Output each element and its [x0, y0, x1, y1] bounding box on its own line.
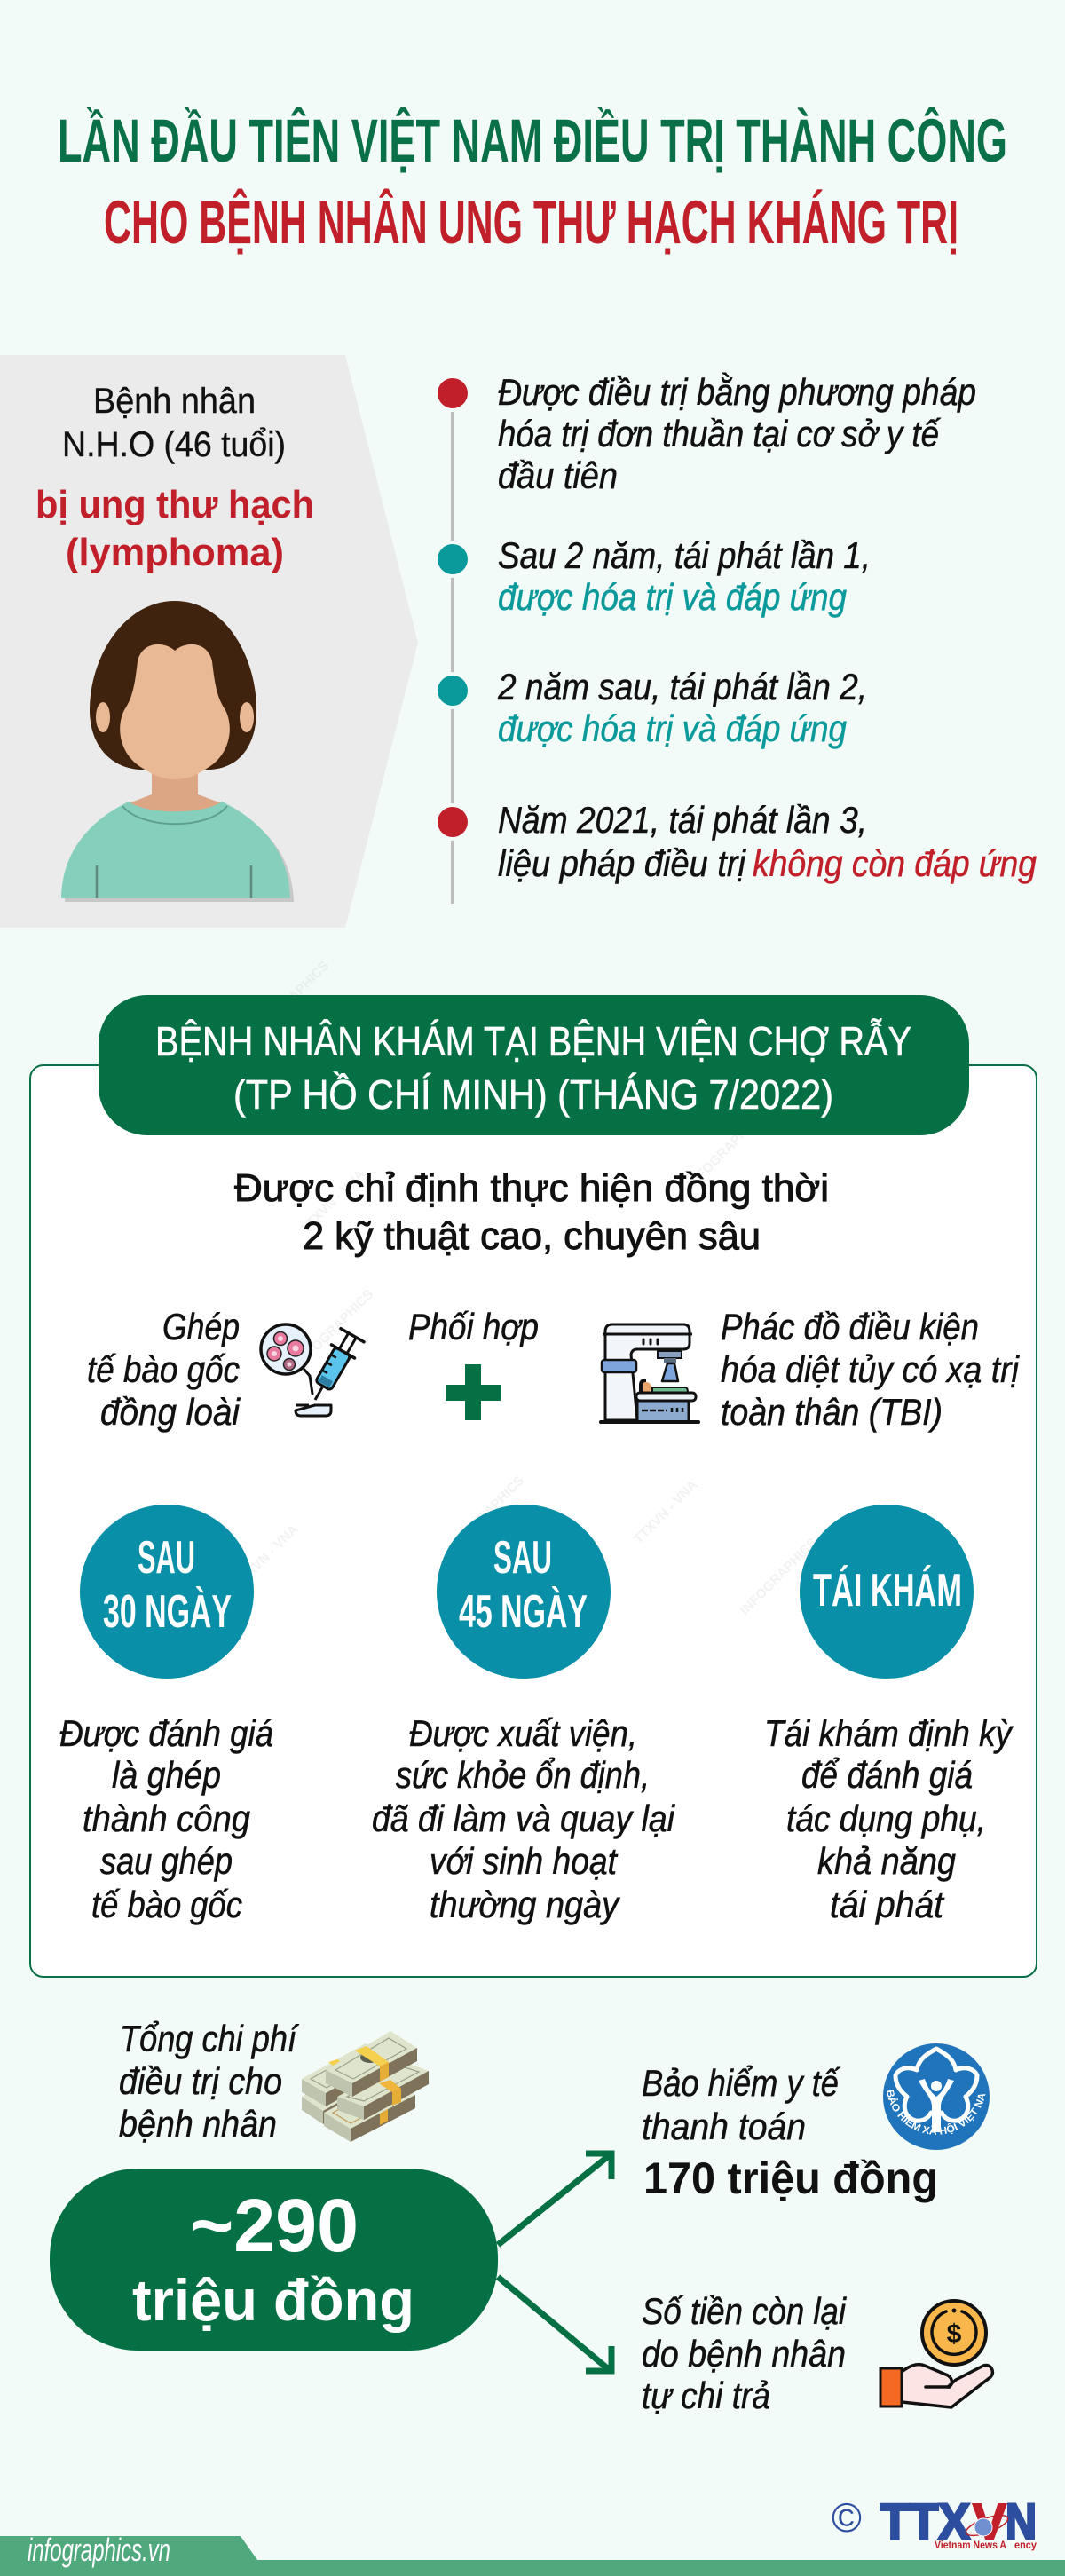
- total cost label: Tổng chi phí: [120, 2018, 300, 2059]
- column: follow-up: [764, 1505, 1014, 1925]
- section heading pill: BỆNH NHÂN KHÁM TẠI BỆNH VIỆN CHỢ RẪY: [155, 1018, 911, 1064]
- timeline step 3: được hóa trị và đáp ứng: [498, 707, 847, 749]
- total cost pill: ~290: [190, 2184, 359, 2267]
- patient label: (lymphoma): [66, 531, 284, 574]
- column: after 30 days: sau ghép: [100, 1840, 233, 1882]
- logo: TTXVN: V: [973, 2493, 1006, 2550]
- column: after 30 days: 30 NGÀY: [103, 1586, 232, 1638]
- column: follow-up: Tái khám định kỳ: [764, 1712, 1014, 1754]
- total cost label: [119, 2018, 300, 2145]
- total cost pill: triệu đồng: [132, 2267, 414, 2333]
- patient label: [36, 382, 314, 574]
- panel: hospital treatment: INFOGRAPHICS: [249, 958, 332, 1041]
- footer bar: [0, 2532, 1065, 2576]
- icon: cells and syringe: [261, 1324, 364, 1416]
- subheading: 2 kỹ thuật cao, chuyên sâu: [303, 1214, 761, 1258]
- title: [58, 107, 1007, 257]
- timeline step 3: 2 năm sau, tái phát lần 2,: [497, 666, 867, 707]
- insurance text: thanh toán: [642, 2106, 806, 2147]
- technique: conditioning regimen: toàn thân (TBI): [721, 1391, 943, 1433]
- timeline step 4: liệu pháp điều trị: [498, 842, 747, 884]
- panel: hospital treatment: INFOGRAPHICS: [738, 1535, 820, 1618]
- icon: social insurance logo: BẢO HIỂM XÃ HỘI VIỆT NAM: [887, 2090, 985, 2135]
- insurance text: [642, 2062, 938, 2203]
- timeline step 1: hóa trị đơn thuần tại cơ sở y tế: [498, 413, 941, 454]
- subheading: Được chỉ định thực hiện đồng thời: [234, 1166, 829, 1210]
- insurance text: Bảo hiểm y tế: [642, 2062, 840, 2104]
- column: after 30 days: tế bào gốc: [91, 1884, 242, 1925]
- insurance text: 170 triệu đồng: [643, 2153, 938, 2203]
- patient share text: Số tiền còn lại: [642, 2290, 847, 2332]
- combine: plus: [408, 1306, 539, 1420]
- column: after 45 days: [372, 1505, 675, 1925]
- column: after 45 days: thường ngày: [430, 1884, 621, 1925]
- panel: hospital treatment: INFOGRAPHICS: [294, 1286, 376, 1370]
- column: after 45 days: đã đi làm và quay lại: [372, 1798, 675, 1839]
- technique: stem cell transplant: Ghép: [162, 1306, 240, 1347]
- icon: plus: [446, 1364, 501, 1420]
- logo: TTXVN: [832, 2493, 1037, 2551]
- combine: plus: Phối hợp: [408, 1306, 539, 1347]
- patient label: bị ung thư hạch: [36, 483, 314, 526]
- column: after 30 days: thành công: [83, 1798, 250, 1839]
- patient share text: [642, 2290, 847, 2416]
- timeline step 2: được hóa trị và đáp ứng: [498, 576, 847, 618]
- column: after 45 days: Được xuất viện,: [409, 1712, 637, 1754]
- technique: conditioning regimen: [601, 1306, 1020, 1433]
- patient share text: do bệnh nhân: [642, 2333, 846, 2375]
- total cost label: bệnh nhân: [119, 2103, 277, 2145]
- panel: hospital treatment: [30, 958, 1037, 1977]
- timeline step 1: đầu tiên: [498, 454, 618, 496]
- logo: TTXVN: ency: [1014, 2539, 1037, 2551]
- timeline step 2: Sau 2 năm, tái phát lần 1,: [498, 534, 871, 576]
- panel: hospital treatment: TTXVN - VNA: [232, 1521, 302, 1592]
- column: follow-up: để đánh giá: [801, 1754, 973, 1796]
- panel: hospital treatment: TTXVN - VNA: [298, 1166, 368, 1237]
- timeline step 3: [434, 666, 867, 749]
- arrow: to insurance: [498, 2153, 611, 2245]
- timeline step 1: Được điều trị bằng phương pháp: [498, 371, 976, 413]
- icon: money stacks: [302, 2031, 429, 2142]
- arrow: to patient: [498, 2277, 611, 2371]
- icon: radiotherapy machine: [601, 1324, 698, 1422]
- technique: stem cell transplant: đồng loài: [100, 1391, 241, 1433]
- technique: stem cell transplant: [87, 1306, 364, 1433]
- column: follow-up: TÁI KHÁM: [813, 1565, 962, 1616]
- total cost pill: [50, 2169, 498, 2351]
- column: after 45 days: 45 NGÀY: [459, 1586, 588, 1638]
- patient share text: tự chi trả: [642, 2375, 770, 2416]
- timeline step 1: [434, 371, 976, 496]
- icon: coin in hand: $: [947, 2319, 962, 2349]
- icon: coin in hand: [880, 2301, 992, 2407]
- patient label: N.H.O (46 tuổi): [62, 425, 286, 464]
- technique: stem cell transplant: tế bào gốc: [87, 1348, 240, 1390]
- timeline step 4: không còn đáp ứng: [753, 842, 1037, 884]
- technique: conditioning regimen: Phác đồ điều kiện: [721, 1306, 979, 1347]
- section heading pill: [99, 995, 969, 1135]
- column: follow-up: tác dụng phụ,: [786, 1798, 986, 1839]
- icon: social insurance logo: [883, 2043, 990, 2150]
- column: after 30 days: SAU: [138, 1532, 195, 1584]
- timeline step 2: [434, 534, 871, 618]
- panel: hospital treatment: TTXVN - VNA: [631, 1477, 701, 1547]
- column: after 45 days: sức khỏe ổn định,: [396, 1754, 650, 1796]
- column: after 30 days: [59, 1505, 273, 1925]
- logo: TTXVN: N: [1006, 2493, 1037, 2550]
- column: after 45 days: SAU: [493, 1532, 552, 1584]
- column: follow-up: khả năng: [817, 1840, 956, 1882]
- logo: TTXVN: TTX: [880, 2493, 970, 2550]
- panel: hospital treatment: INFOGRAPHICS: [684, 1109, 767, 1192]
- footer bar: infographics.vn: [28, 2532, 170, 2568]
- panel: patient: [0, 355, 418, 928]
- total cost label: điều trị cho: [119, 2060, 282, 2102]
- column: after 30 days: là ghép: [112, 1754, 221, 1796]
- column: after 45 days: với sinh hoạt: [430, 1840, 619, 1882]
- patient label: Bệnh nhân: [93, 382, 256, 421]
- section heading pill: (TP HỒ CHÍ MINH) (THÁNG 7/2022): [233, 1071, 833, 1118]
- technique: conditioning regimen: hóa diệt tủy có xạ trị: [721, 1348, 1020, 1390]
- column: after 30 days: Được đánh giá: [59, 1712, 273, 1754]
- subheading: [234, 1166, 829, 1258]
- timeline step 4: Năm 2021, tái phát lần 3,: [498, 799, 867, 841]
- logo: TTXVN: ©: [832, 2494, 862, 2540]
- timeline: [434, 371, 1037, 904]
- logo: TTXVN: Vietnam News A: [935, 2539, 1006, 2551]
- panel: hospital treatment: INFOGRAPHICS: [445, 1473, 527, 1556]
- column: follow-up: tái phát: [830, 1884, 945, 1925]
- icon: patient portrait: [61, 601, 294, 902]
- timeline step 4: [434, 799, 1037, 884]
